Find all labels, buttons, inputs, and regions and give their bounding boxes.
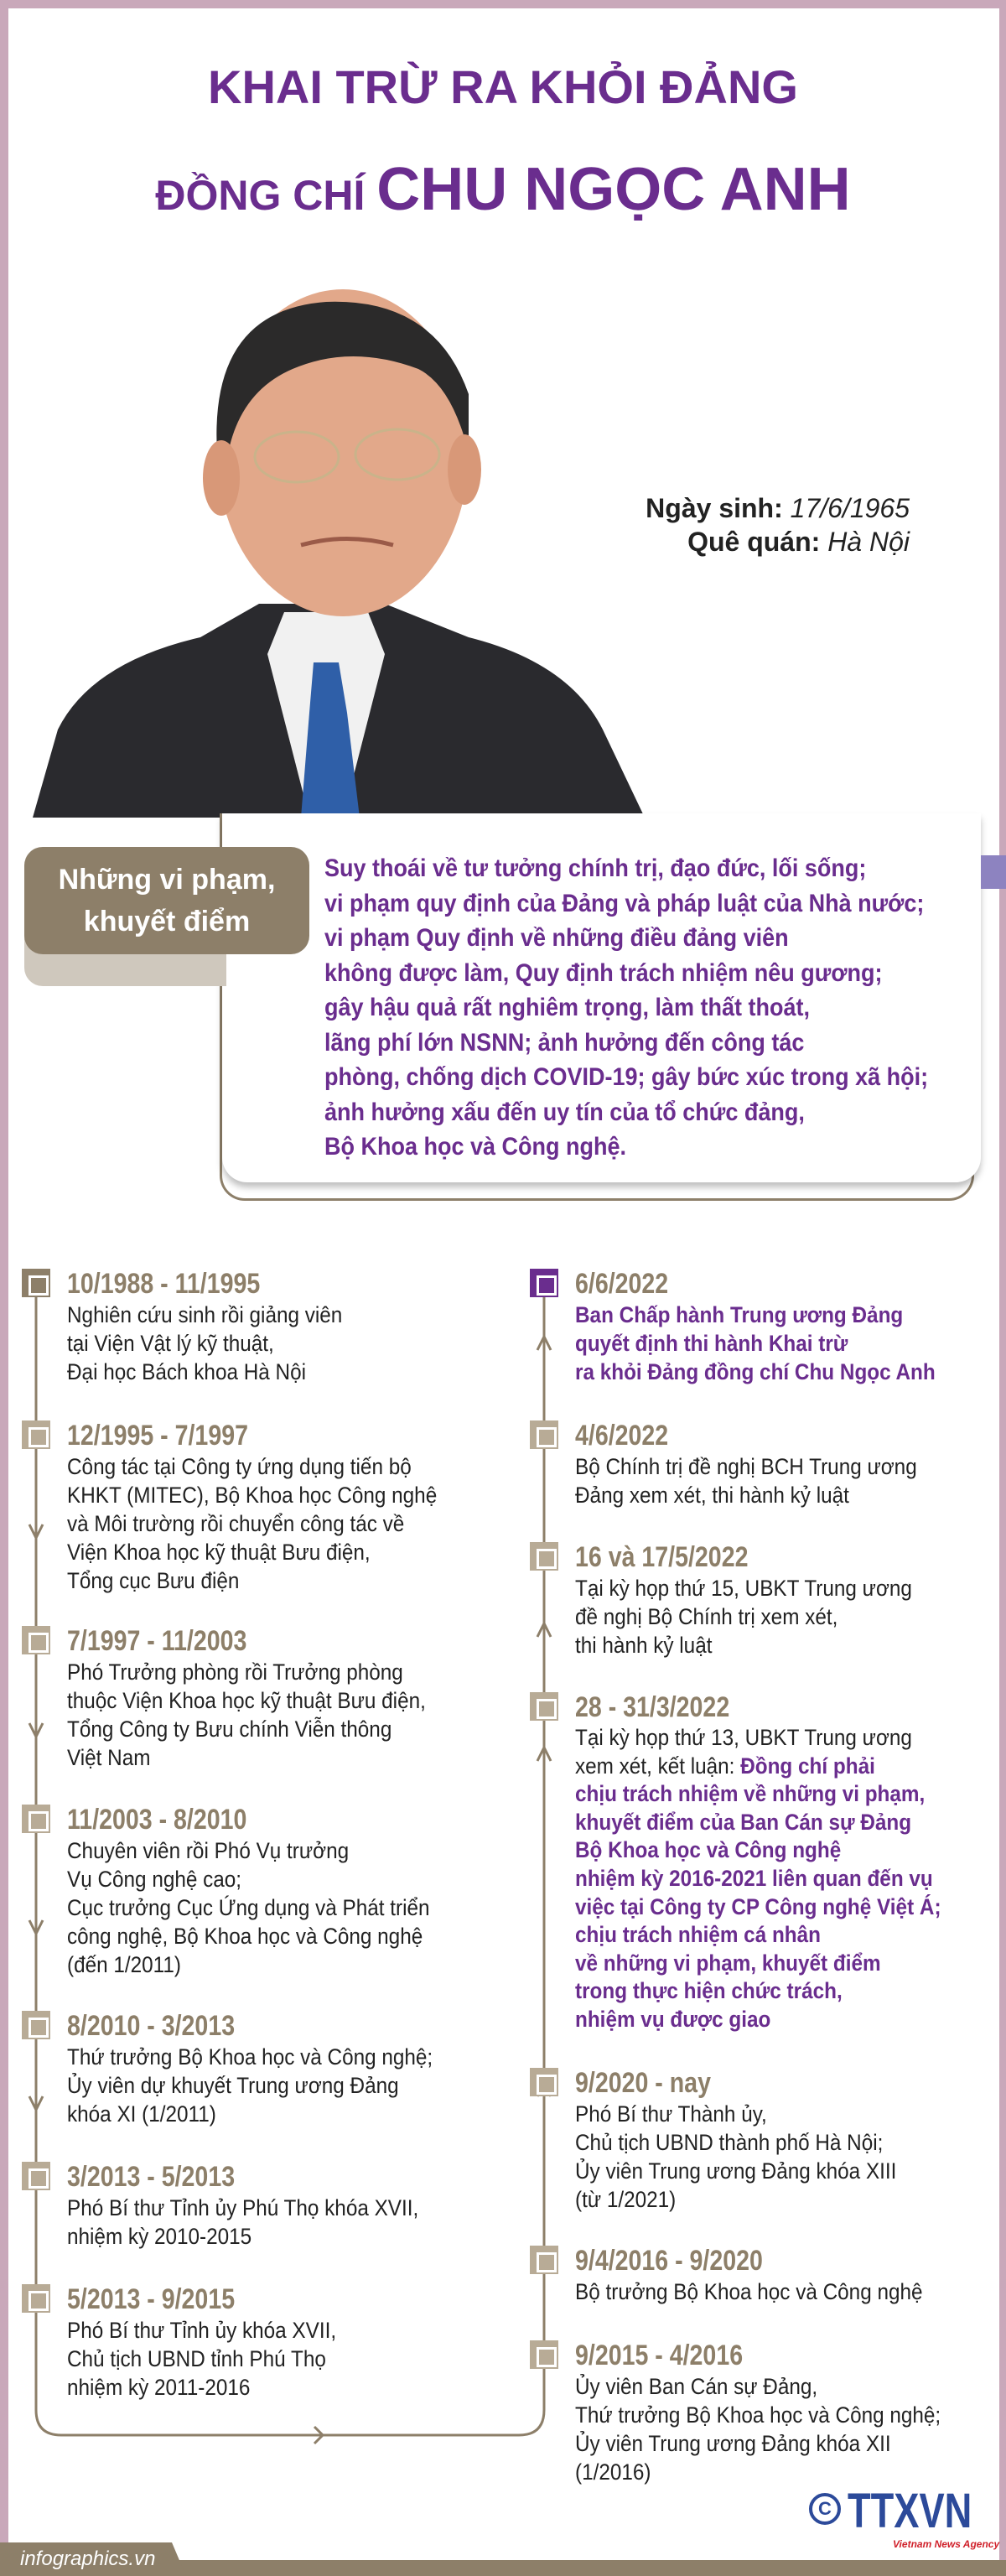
entry 10/1988: tại Viện Vật lý kỹ thuật,: [67, 1331, 274, 1356]
logo: TTXVN: [809, 2484, 1000, 2550]
logo: TTXVN: TTXVN: [848, 2484, 972, 2538]
label: Những vi phạm: Những vi phạm,: [59, 864, 275, 896]
entry 9/2015: [530, 2340, 941, 2485]
entry 7/1997: [22, 1625, 426, 1770]
title: KHAI TRỪ RA KHỎI ĐẢNG: [208, 60, 798, 113]
entry 11/2003: Vụ Công nghệ cao;: [67, 1867, 241, 1892]
violation text: lãng phí lớn NSNN; ảnh hưởng đến công tác: [324, 1028, 804, 1057]
entry 10/1988: Nghiên cứu sinh rồi giảng viên: [67, 1302, 342, 1327]
frame border: [0, 0, 1006, 8]
entry 8/2010: 8/2010 - 3/2013: [67, 2010, 235, 2042]
entry 16 và 17/5/2022: đề nghị Bộ Chính trị xem xét,: [575, 1604, 837, 1629]
entry 10/1988: [22, 1268, 342, 1384]
entry 28 - 31/3/2022: Tại kỳ họp thứ 13, UBKT Trung ương: [575, 1725, 912, 1750]
entry 9/2020: Phó Bí thư Thành ủy,: [575, 2101, 767, 2127]
entry 3/2013: 3/2013 - 5/2013: [67, 2161, 235, 2193]
footer: [0, 2560, 1006, 2576]
entry 5/2013: 5/2013 - 9/2015: [67, 2283, 235, 2315]
entry 12/1995: và Môi trường rồi chuyển công tác về: [67, 1511, 404, 1536]
entry 4/6/2022: [530, 1420, 917, 1508]
violation text: vi phạm Quy định về những điều đảng viên: [324, 924, 789, 952]
entry 9/4/2016: Bộ trưởng Bộ Khoa học và Công nghệ: [575, 2279, 923, 2304]
entry 7/1997: 7/1997 - 11/2003: [67, 1625, 246, 1657]
violation text: vi phạm quy định của Đảng và pháp luật của Nhà nước;: [324, 889, 924, 917]
entry 16 và 17/5/2022: Tại kỳ họp thứ 15, UBKT Trung ương: [575, 1576, 912, 1601]
personal info: Quê quán: Hà Nội: [687, 527, 910, 557]
entry 3/2013: [22, 2161, 418, 2249]
timeline right: [530, 1268, 941, 2485]
entry 8/2010: Ủy viên dự khuyết Trung ương Đảng: [67, 2073, 399, 2098]
entry 28 - 31/3/2022: chịu trách nhiệm về những vi phạm,: [575, 1781, 925, 1806]
entry 6/6/2022: Ban Chấp hành Trung ương Đảng: [575, 1302, 903, 1327]
entry 6/6/2022: quyết định thi hành Khai trừ: [575, 1331, 848, 1356]
logo: TTXVN: C: [818, 2498, 832, 2519]
entry 28 - 31/3/2022: chịu trách nhiệm cá nhân: [575, 1922, 821, 1947]
entry 12/1995: Công tác tại Công ty ứng dụng tiến bộ: [67, 1454, 412, 1479]
entry 5/2013: Phó Bí thư Tỉnh ủy khóa XVII,: [67, 2318, 336, 2343]
timeline lines: [29, 1297, 552, 2444]
entry 11/2003: [22, 1804, 430, 1977]
title: [155, 60, 851, 223]
entry 10/1988: Đại học Bách khoa Hà Nội: [67, 1359, 306, 1384]
entry 4/6/2022: 4/6/2022: [575, 1420, 668, 1452]
entry 11/2003: (đến 1/2011): [67, 1952, 181, 1977]
photo: portrait: [33, 289, 643, 818]
entry 9/2015: (1/2016): [575, 2459, 651, 2485]
entry 5/2013: Chủ tịch UBND tỉnh Phú Thọ: [67, 2346, 326, 2371]
entry 5/2013: [22, 2283, 336, 2400]
entry 6/6/2022: [530, 1268, 936, 1384]
entry 4/6/2022: Bộ Chính trị đề nghị BCH Trung ương: [575, 1454, 917, 1479]
entry 7/1997: thuộc Viện Khoa học kỹ thuật Bưu điện,: [67, 1688, 426, 1713]
personal info: Ngày sinh: 17/6/1965: [646, 493, 910, 523]
entry 28 - 31/3/2022: nhiệm kỳ 2016-2021 liên quan đến vụ: [575, 1866, 933, 1891]
entry 12/1995: 12/1995 - 7/1997: [67, 1420, 248, 1452]
timeline left: [22, 1268, 437, 2400]
violation text: gây hậu quả rất nghiêm trọng, làm thất thoát,: [324, 994, 810, 1021]
entry 28 - 31/3/2022: khuyết điểm của Ban Cán sự Đảng: [575, 1810, 911, 1835]
entry 16 và 17/5/2022: [530, 1541, 912, 1658]
entry 28 - 31/3/2022: xem xét, kết luận: Đồng chí phải: [575, 1753, 875, 1779]
entry 28 - 31/3/2022: về những vi phạm, khuyết điểm: [575, 1950, 881, 1976]
entry 3/2013: nhiệm kỳ 2010-2015: [67, 2224, 252, 2249]
entry 11/2003: công nghệ, Bộ Khoa học và Công nghệ: [67, 1924, 423, 1949]
entry 11/2003: 11/2003 - 8/2010: [67, 1804, 246, 1836]
violation text: Suy thoái về tư tưởng chính trị, đạo đức, lối sống;: [324, 854, 866, 882]
entry 28 - 31/3/2022: 28 - 31/3/2022: [575, 1691, 729, 1723]
entry 8/2010: [22, 2010, 433, 2127]
violation text: không được làm, Quy định trách nhiệm nêu gương;: [324, 959, 883, 986]
entry 6/6/2022: ra khỏi Đảng đồng chí Chu Ngọc Anh: [575, 1359, 936, 1384]
entry 9/2020: [530, 2067, 896, 2212]
text: infographics.vn: [20, 2547, 155, 2570]
entry 9/2015: 9/2015 - 4/2016: [575, 2340, 743, 2371]
entry 9/2020: Ủy viên Trung ương Đảng khóa XIII: [575, 2158, 896, 2184]
entry 10/1988: 10/1988 - 11/1995: [67, 1268, 260, 1300]
entry 4/6/2022: Đảng xem xét, thi hành kỷ luật: [575, 1483, 849, 1508]
entry 16 và 17/5/2022: thi hành kỷ luật: [575, 1633, 712, 1658]
violation text: phòng, chống dịch COVID-19; gây bức xúc trong xã hội;: [324, 1063, 928, 1091]
entry 9/2015: Ủy viên Trung ương Đảng khóa XII: [575, 2431, 891, 2456]
entry 11/2003: Cục trưởng Cục Ứng dụng và Phát triển: [67, 1895, 430, 1920]
entry 9/2015: Ủy viên Ban Cán sự Đảng,: [575, 2374, 817, 2399]
entry 28 - 31/3/2022: [530, 1691, 941, 2032]
entry 9/2015: Thứ trưởng Bộ Khoa học và Công nghệ;: [575, 2402, 941, 2428]
entry 9/2020: Chủ tịch UBND thành phố Hà Nội;: [575, 2130, 883, 2155]
entry 6/6/2022: 6/6/2022: [575, 1268, 668, 1300]
entry 9/2020: 9/2020 - nay: [575, 2067, 711, 2099]
panel: violations: [24, 813, 1006, 1201]
entry 16 và 17/5/2022: 16 và 17/5/2022: [575, 1541, 748, 1573]
entry 7/1997: Việt Nam: [67, 1745, 150, 1770]
entry 9/2020: (từ 1/2021): [575, 2187, 676, 2212]
label: Những vi phạm: [24, 847, 309, 954]
label: Những vi phạm: khuyết điểm: [84, 906, 250, 937]
entry 28 - 31/3/2022: Bộ Khoa học và Công nghệ: [575, 1837, 841, 1862]
entry 9/4/2016: 9/4/2016 - 9/2020: [575, 2245, 763, 2277]
violation text: Bộ Khoa học và Công nghệ.: [324, 1133, 626, 1161]
title: ĐỒNG CHÍ CHU NGỌC ANH: [155, 156, 851, 223]
entry 12/1995: Tổng cục Bưu điện: [67, 1568, 239, 1593]
entry 28 - 31/3/2022: trong thực hiện chức trách,: [575, 1978, 843, 2003]
entry 9/4/2016: [530, 2245, 923, 2304]
violation text: ảnh hưởng xấu đến uy tín của tổ chức đảng,: [324, 1098, 805, 1125]
violation text: [324, 854, 928, 1161]
personal info: [646, 493, 910, 557]
entry 12/1995: Viện Khoa học kỹ thuật Bưu điện,: [67, 1540, 371, 1565]
entry 28 - 31/3/2022: nhiệm vụ được giao: [575, 2007, 770, 2032]
entry 8/2010: khóa XI (1/2011): [67, 2101, 216, 2127]
entry 12/1995: KHKT (MITEC), Bộ Khoa học Công nghệ: [67, 1483, 437, 1508]
entry 5/2013: nhiệm kỳ 2011-2016: [67, 2375, 250, 2400]
entry 8/2010: Thứ trưởng Bộ Khoa học và Công nghệ;: [67, 2044, 433, 2070]
entry 12/1995: [22, 1420, 437, 1593]
logo: TTXVN: Vietnam News Agency: [893, 2538, 999, 2550]
entry 28 - 31/3/2022: việc tại Công ty CP Công nghệ Việt Á;: [575, 1894, 941, 1919]
entry 3/2013: Phó Bí thư Tỉnh ủy Phú Thọ khóa XVII,: [67, 2195, 418, 2220]
entry 7/1997: Tổng Công ty Bưu chính Viễn thông: [67, 1716, 392, 1742]
entry 11/2003: Chuyên viên rồi Phó Vụ trưởng: [67, 1838, 349, 1863]
entry 7/1997: Phó Trưởng phòng rồi Trưởng phòng: [67, 1659, 403, 1685]
